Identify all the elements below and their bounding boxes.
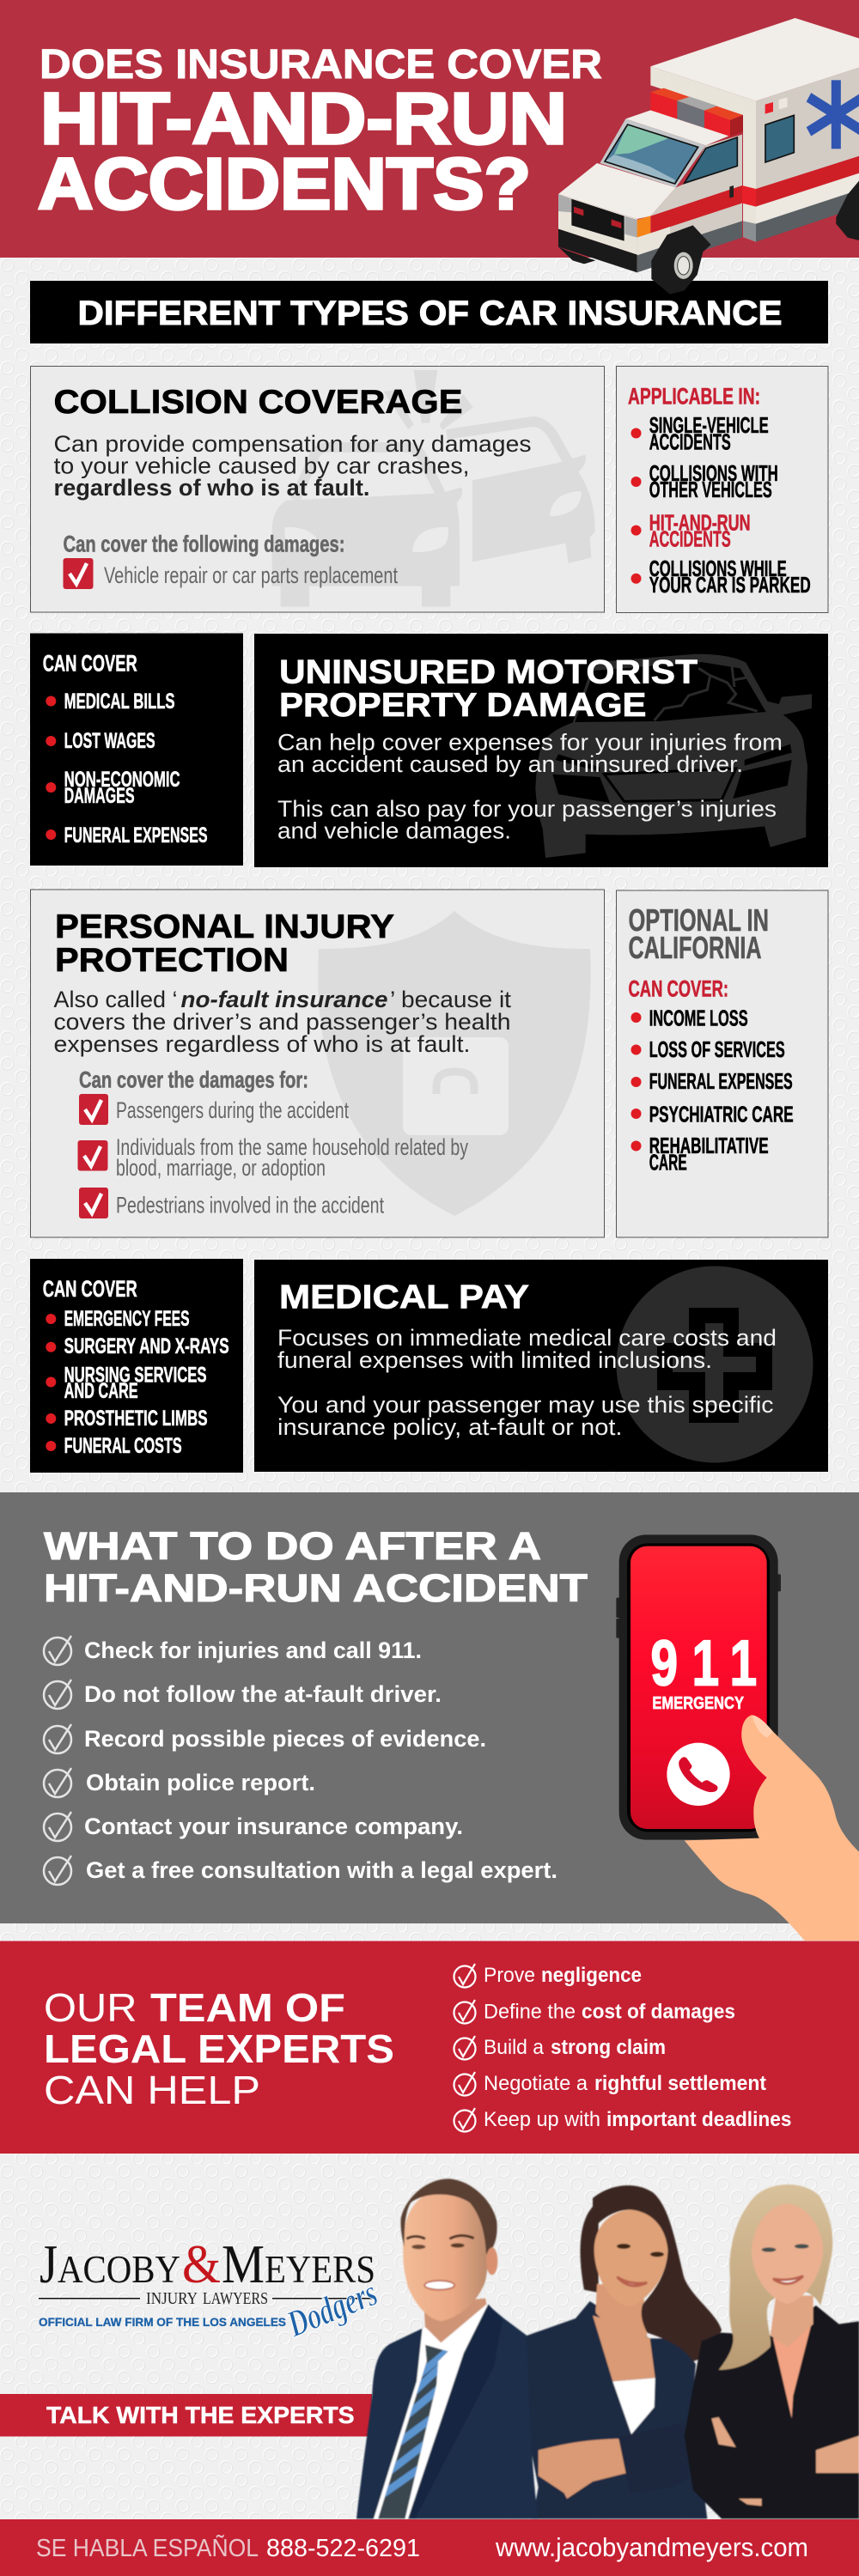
panel: UMPD can cover — [30, 634, 243, 866]
list: LOST WAGES — [64, 729, 155, 753]
heading — [44, 1985, 394, 2112]
checklist: Passengers during the accident — [116, 1097, 349, 1123]
heading: WHAT TO DO AFTER A — [44, 1524, 541, 1568]
description — [277, 729, 783, 844]
person: brunette woman — [521, 2185, 722, 2518]
list — [46, 690, 208, 848]
person: man in navy suit — [356, 2178, 539, 2518]
list of services: Prove — [484, 1964, 535, 1987]
logo: Jacoby & Meyers: EYERS — [265, 2248, 375, 2291]
panel: collision coverage — [31, 366, 605, 612]
checklist: Record possible pieces of evidence. — [84, 1726, 486, 1752]
logo: Jacoby & Meyers: J — [40, 2233, 58, 2294]
list: NON-ECONOMIC — [64, 768, 180, 792]
description: an accident caused by an uninsured driver. — [277, 751, 743, 777]
description — [53, 987, 512, 1057]
logo: Jacoby & Meyers: INJURY — [146, 2289, 198, 2308]
hand — [685, 1715, 859, 1941]
description: regardless of who is at fault. — [53, 475, 369, 501]
subheading: Can cover the damages for: — [79, 1067, 308, 1093]
logo: Jacoby & Meyers: LAWYERS — [203, 2289, 268, 2308]
icon: ambulance — [558, 18, 859, 295]
checklist: Check for injuries and call 911. — [84, 1637, 422, 1663]
logo: Jacoby & Meyers: ACOBY — [58, 2248, 180, 2291]
icon: medical cross watermark — [617, 1266, 813, 1463]
description: funeral expenses with limited inclusions. — [277, 1347, 712, 1373]
list: MEDICAL BILLS — [64, 690, 175, 714]
person: blonde woman — [685, 2184, 859, 2518]
list of services: important deadlines — [606, 2108, 792, 2131]
icon: crashed cars watermark — [272, 370, 595, 607]
Dodgers script: Dodgers — [281, 2271, 383, 2346]
list: PSYCHIATRIC CARE — [649, 1103, 794, 1127]
description: expenses regardless of who is at fault. — [53, 1031, 471, 1057]
list: AND CARE — [64, 1379, 138, 1403]
heading — [55, 908, 394, 979]
list of services — [454, 1964, 792, 2131]
heading: CAN COVER — [43, 1276, 137, 1302]
heading: CAN HELP — [44, 2068, 260, 2112]
heading — [629, 902, 769, 965]
heading: LEGAL EXPERTS — [44, 2026, 394, 2071]
checklist — [77, 1094, 468, 1218]
description: Also called ‘ — [53, 987, 177, 1012]
description: Can provide compensation for any damages — [53, 431, 531, 457]
panel: medical pay can cover — [30, 1259, 243, 1473]
description: This can also pay for your passenger’s injuries — [277, 796, 777, 822]
list: SURGERY AND X-RAYS — [64, 1334, 229, 1358]
heading: CALIFORNIA — [629, 930, 761, 965]
checklist: Do not follow the at-fault driver. — [84, 1681, 442, 1707]
panel: applicable in — [617, 366, 828, 613]
list: LOSS OF SERVICES — [649, 1038, 785, 1062]
logo: Jacoby & Meyers: & — [182, 2233, 221, 2294]
description: no-fault insurance — [180, 987, 388, 1012]
header banner — [0, 0, 859, 258]
list: HIT-AND-RUN — [649, 512, 751, 536]
description: and vehicle damages. — [277, 818, 511, 844]
checklist: Contact your insurance company. — [84, 1814, 463, 1839]
heading: APPLICABLE IN: — [628, 383, 760, 409]
heading: PROTECTION — [55, 942, 289, 979]
checklist — [44, 1636, 557, 1885]
panel: optional in California — [617, 890, 828, 1237]
logo: Jacoby & Meyers — [39, 2233, 383, 2346]
list: ACCIDENTS — [649, 528, 731, 552]
website: www.jacobyandmeyers.com — [495, 2532, 808, 2562]
checklist: Get a free consultation with a legal expert. — [86, 1857, 557, 1883]
phone number: 888-522-6291 — [266, 2535, 420, 2562]
panel: personal injury protection — [31, 890, 605, 1237]
list: FUNERAL COSTS — [64, 1434, 182, 1458]
description: to your vehicle caused by car crashes, — [53, 453, 469, 479]
subheading: CAN COVER: — [629, 975, 728, 1001]
subheading: Can cover the following damages: — [64, 531, 345, 556]
call to action bar: TALK WITH THE EXPERTS — [46, 2402, 355, 2428]
heading: TEAM OF — [150, 1985, 345, 2030]
call button — [667, 1743, 730, 1806]
heading: CAN COVER — [43, 651, 137, 677]
heading: OPTIONAL IN — [629, 902, 769, 938]
checklist: Obtain police report. — [86, 1770, 315, 1795]
panel: what to do after an accident — [0, 1492, 859, 1923]
checklist: Pedestrians involved in the accident — [116, 1192, 384, 1218]
heading: HIT-AND-RUN ACCIDENT — [44, 1566, 588, 1610]
panel: medical pay — [254, 1260, 828, 1472]
heading: OUR — [44, 1985, 137, 2030]
list: REHABILITATIVE — [649, 1134, 769, 1158]
description — [53, 431, 531, 501]
911 number: 911 — [650, 1628, 757, 1700]
section heading bar: DIFFERENT TYPES OF CAR INSURANCE — [77, 295, 782, 332]
icon: phone in hand — [616, 1534, 859, 1941]
checkbox item — [64, 558, 398, 589]
section heading bar — [30, 281, 828, 343]
icon: shield with padlock watermark — [318, 911, 591, 1216]
list: COLLISIONS WITH — [649, 462, 778, 486]
description: You and your passenger may use this specific — [277, 1392, 773, 1418]
list: PROSTHETIC LIMBS — [64, 1406, 208, 1431]
list — [631, 414, 811, 598]
checklist: Individuals from the same household related by — [116, 1134, 468, 1160]
list: EMERGENCY FEES — [64, 1307, 190, 1331]
list: INCOME LOSS — [649, 1006, 748, 1030]
list: NURSING SERVICES — [64, 1364, 207, 1388]
heading — [279, 654, 698, 724]
description: covers the driver’s and passenger’s health — [53, 1009, 510, 1035]
list: DAMAGES — [64, 784, 135, 808]
list of services: strong claim — [551, 2036, 666, 2059]
list of services: Negotiate a — [484, 2072, 588, 2095]
heading: PERSONAL INJURY — [55, 908, 394, 945]
checklist: blood, marriage, or adoption — [116, 1155, 326, 1181]
list of services: Define the — [484, 2001, 576, 2023]
photo: team of lawyers — [356, 2178, 859, 2518]
language note: SE HABLA ESPAÑOL — [36, 2533, 259, 2562]
description: ’ because it — [390, 987, 512, 1012]
panel: uninsured motorist property damage — [254, 634, 828, 867]
title line 2: HIT-AND-RUN — [40, 78, 567, 159]
emergency label: EMERGENCY — [652, 1693, 744, 1713]
title line 1: DOES INSURANCE COVER — [40, 42, 602, 88]
list — [631, 1006, 794, 1175]
logo: Jacoby & Meyers: M — [222, 2233, 265, 2294]
list of services: negligence — [541, 1964, 642, 1987]
list: ACCIDENTS — [649, 431, 731, 455]
description — [277, 1325, 777, 1440]
heading — [44, 1524, 588, 1610]
heading: MEDICAL PAY — [279, 1279, 529, 1316]
heading: PROPERTY DAMAGE — [279, 687, 646, 724]
list of services: Keep up with — [484, 2108, 600, 2131]
panel: legal team can help — [0, 1941, 859, 2154]
checkbox item: Vehicle repair or car parts replacement — [104, 562, 398, 588]
title line 3: ACCIDENTS? — [38, 143, 531, 224]
heading: COLLISION COVERAGE — [53, 384, 462, 421]
logo: Jacoby & Meyers: OFFICIAL LAW FIRM OF THE LOS ANGELES — [39, 2315, 286, 2329]
list: FUNERAL EXPENSES — [64, 823, 208, 848]
heading: UNINSURED MOTORIST — [279, 654, 698, 690]
footer bar — [0, 2519, 859, 2576]
list: OTHER VEHICLES — [649, 478, 772, 502]
icon: damaged car watermark — [535, 654, 812, 858]
description: Can help cover expenses for your injuries from — [277, 729, 783, 755]
call to action bar — [0, 2394, 372, 2437]
description: insurance policy, at-fault or not. — [277, 1414, 622, 1440]
list: COLLISIONS WHILE — [649, 557, 787, 581]
list: CARE — [649, 1151, 687, 1175]
list of services: rightful settlement — [594, 2072, 766, 2095]
description: Focuses on immediate medical care costs and — [277, 1325, 777, 1351]
list of services: Build a — [484, 2036, 545, 2059]
list — [46, 1307, 229, 1458]
list: SINGLE-VEHICLE — [649, 414, 769, 438]
list of services: cost of damages — [582, 2001, 735, 2023]
